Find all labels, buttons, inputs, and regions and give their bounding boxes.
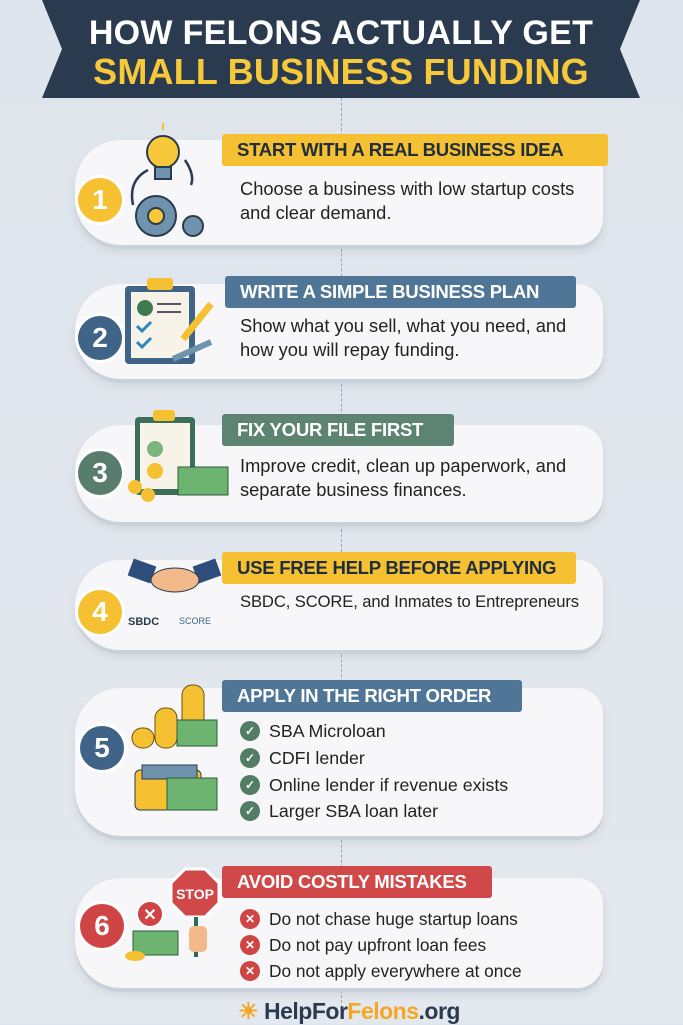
text: step 1 xyxy=(240,178,574,223)
title banner xyxy=(42,0,640,98)
number 4 xyxy=(78,590,122,634)
checklist xyxy=(240,721,508,821)
number 3 xyxy=(78,451,122,495)
icon: stop sign and cash: STOP xyxy=(176,886,214,902)
number 5 xyxy=(80,726,124,770)
checklist: CDFI lender xyxy=(269,748,365,768)
icon: lightbulb and gears xyxy=(130,123,204,237)
checklist: Online lender if revenue exists xyxy=(269,775,508,795)
mistakes list xyxy=(240,909,522,981)
label: step 4 heading: USE FREE HELP BEFORE APPLYING xyxy=(237,557,556,578)
label: step 2 heading xyxy=(225,276,576,308)
label: step 1 heading: START WITH A REAL BUSINESS IDEA xyxy=(237,139,563,160)
panel: step 3 xyxy=(74,410,604,528)
number 6: 6 xyxy=(94,910,110,941)
icon: handshake and logos: SBDC xyxy=(128,616,159,628)
title line 1: HOW FELONS ACTUALLY GET xyxy=(89,14,593,52)
checklist: ✓ xyxy=(245,804,255,818)
panel: step 5 xyxy=(74,680,604,842)
number 1: 1 xyxy=(92,184,108,215)
text: step 2: Show what you sell, what you need, and xyxy=(240,315,566,336)
panel: step 2 xyxy=(74,276,604,386)
mistakes list: ✕ xyxy=(245,964,255,978)
icon: handshake and logos xyxy=(128,558,222,628)
number 4: 4 xyxy=(92,596,108,627)
icon: clipboard plan xyxy=(125,278,214,364)
checklist: SBA Microloan xyxy=(269,721,386,741)
mistakes list: Do not apply everywhere at once xyxy=(269,961,522,981)
label: step 3 heading: FIX YOUR FILE FIRST xyxy=(237,419,423,440)
checklist: ✓ xyxy=(245,778,255,792)
label: step 5 heading xyxy=(222,680,522,712)
label: step 6 heading: AVOID COSTLY MISTAKES xyxy=(237,871,467,892)
checklist: ✓ xyxy=(245,751,255,765)
panel: step 1 xyxy=(74,123,608,252)
dashed center line xyxy=(341,98,342,1018)
text: step 3 xyxy=(240,455,566,500)
label: step 4 heading xyxy=(222,552,576,584)
mistakes list: ✕ xyxy=(245,938,255,952)
icon: credit report and money xyxy=(128,410,228,502)
checklist: Larger SBA loan later xyxy=(269,801,438,821)
number 2 xyxy=(78,316,122,360)
text: step 2: how you will repay funding. xyxy=(240,339,460,360)
text: step 1: Choose a business with low startup costs xyxy=(240,178,574,199)
text: step 3: Improve credit, clean up paperwork, and xyxy=(240,455,566,476)
icon: stop sign and cash xyxy=(125,868,218,961)
title line 2: SMALL BUSINESS FUNDING xyxy=(93,51,589,92)
mistakes list: ✕ xyxy=(245,912,255,926)
icon: coins and cash xyxy=(132,684,218,810)
icon: stop sign and cash: ✕ xyxy=(143,907,157,924)
footer logo: ☀ HelpForFelons.org xyxy=(238,998,460,1024)
label: step 1 heading xyxy=(222,134,608,166)
label: step 6 heading xyxy=(222,866,492,898)
number 2: 2 xyxy=(92,322,108,353)
checklist: ✓ xyxy=(245,724,255,738)
panel: step 6 xyxy=(74,866,604,994)
mistakes list: Do not chase huge startup loans xyxy=(269,909,518,929)
number 3: 3 xyxy=(92,457,108,488)
text: step 3: separate business finances. xyxy=(240,479,467,500)
number 6 xyxy=(80,904,124,948)
mistakes list: Do not pay upfront loan fees xyxy=(269,935,486,955)
number 1 xyxy=(78,178,122,222)
label: step 5 heading: APPLY IN THE RIGHT ORDER xyxy=(237,685,491,706)
icon: handshake and logos: SCORE xyxy=(179,616,211,626)
panel: step 4 xyxy=(74,552,604,656)
text: step 1: and clear demand. xyxy=(240,202,391,223)
label: step 2 heading: WRITE A SIMPLE BUSINESS PLAN xyxy=(240,281,539,302)
text: step 4: SBDC, SCORE, and Inmates to Entrepreneurs xyxy=(240,592,579,611)
number 5: 5 xyxy=(94,732,110,763)
label: step 3 heading xyxy=(222,414,454,446)
text: step 2 xyxy=(240,315,566,360)
